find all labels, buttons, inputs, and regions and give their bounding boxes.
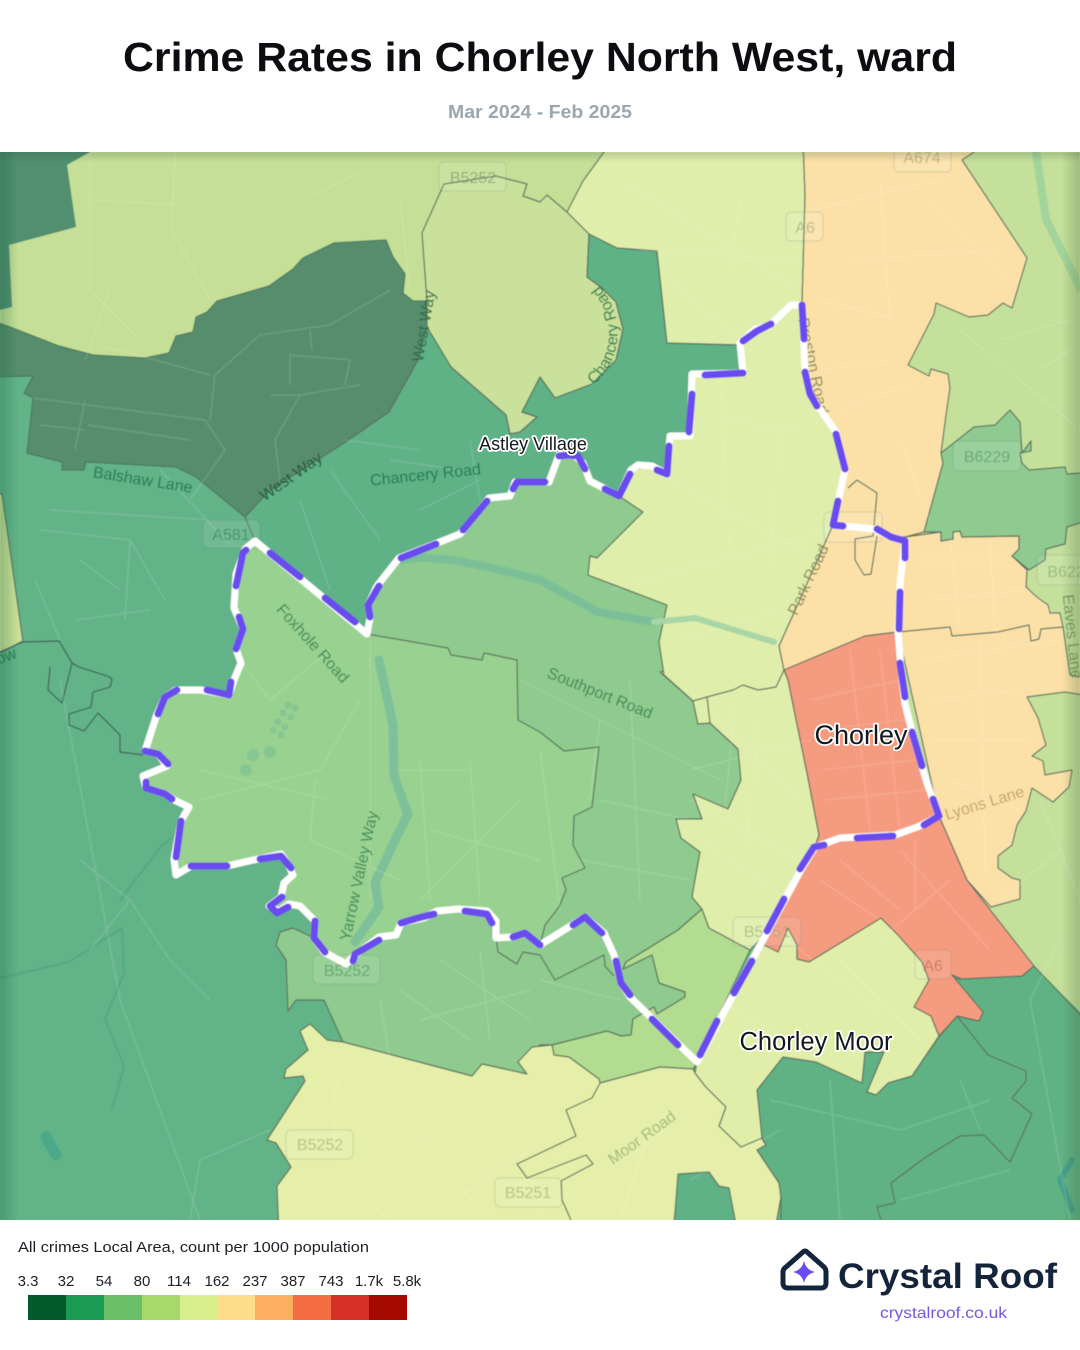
road labels	[0, 286, 1080, 1165]
area: north-west light green	[0, 152, 604, 358]
road labels: Chancery Road	[588, 286, 622, 383]
website: crystalroof.co.uk	[880, 1305, 1008, 1322]
icon: house with star	[783, 1251, 826, 1288]
road shields: A581	[212, 527, 250, 544]
area: town west pale	[660, 653, 819, 950]
legend values: 1.7k	[355, 1273, 384, 1290]
place label: Chorley: Chorley	[814, 720, 908, 750]
title: Crime Rates in Chorley North West, ward	[123, 34, 957, 80]
roundabout tanks	[240, 702, 298, 776]
area: Chancery green	[244, 235, 623, 538]
legend	[18, 1240, 422, 1320]
area: south-east light green	[552, 909, 750, 1083]
legend values: 162	[204, 1273, 230, 1290]
area: Astley north light green	[420, 174, 568, 324]
area: left edge strip	[0, 494, 23, 656]
area: ward north-east pale	[588, 305, 845, 701]
area boundary lines in orange	[848, 480, 1063, 641]
legend values: 743	[318, 1273, 344, 1290]
road labels: Yarrow Valley Way	[338, 810, 382, 942]
road shields: B6229	[964, 449, 1010, 466]
legend values: 5.8k	[393, 1273, 422, 1290]
area: B6229 green	[924, 410, 1080, 570]
legend values: 80	[134, 1273, 150, 1290]
legend values	[18, 1273, 422, 1290]
road shields: B5252	[450, 170, 496, 187]
legend values: 387	[280, 1273, 306, 1290]
west boundary lines and brook	[0, 641, 143, 755]
road labels: Southport Road	[545, 665, 655, 723]
area boundary line: south-east interior	[877, 1016, 1032, 1220]
road labels: Park Road	[785, 542, 833, 618]
road labels: Preston Road	[794, 316, 831, 416]
place label: Astley Village: Astley Village	[479, 434, 587, 454]
area boundary line: notch	[707, 697, 710, 723]
logo: Crystal Roof	[783, 1251, 1057, 1322]
rivers	[0, 152, 1080, 1210]
road shields: A674	[903, 150, 941, 167]
area: south-west pale yellow	[267, 1024, 781, 1235]
ward boundary: purple dashes	[145, 305, 939, 1055]
legend values: 32	[58, 1273, 74, 1290]
legend values: 54	[96, 1273, 112, 1290]
wordmark: Crystal Roof	[838, 1257, 1057, 1296]
road shields	[203, 142, 1080, 1207]
road labels: Chancery Road	[369, 461, 482, 490]
road shields: A6	[795, 220, 815, 237]
legend values: 114	[167, 1273, 191, 1290]
road labels: West Way	[410, 289, 439, 363]
place label: Chorley Moor: Chorley Moor	[739, 1028, 893, 1056]
ward boundary: white line	[143, 305, 939, 1062]
legend values: 3.3	[18, 1273, 38, 1290]
legend values: 237	[242, 1273, 268, 1290]
road labels: Lyons Lane	[943, 784, 1027, 824]
area boundary line: south-west interior	[517, 1083, 600, 1220]
road labels: Foxhole Road	[273, 601, 352, 687]
area: Chorley Moor pale	[695, 918, 939, 1147]
area: east green	[904, 152, 1080, 1013]
road labels: West Way	[257, 450, 326, 505]
area: north pale yellow-green	[567, 140, 805, 345]
road shields: B5251	[744, 924, 790, 941]
road shields: A6	[923, 958, 943, 975]
road shields: B5252	[297, 1137, 343, 1154]
area: Chorley town centre red	[764, 632, 1034, 1036]
legend colour bar	[28, 1295, 407, 1320]
streets	[33, 152, 1080, 1220]
area: south patch green	[673, 1170, 736, 1220]
legend title: All crimes Local Area, count per 1000 population	[18, 1240, 369, 1256]
area: top-left dark block	[0, 140, 90, 312]
area boundary lines in ward	[367, 634, 614, 980]
map edge shading	[0, 152, 1080, 1220]
area: Park Road orange	[779, 525, 905, 670]
road shields: B5251	[505, 1185, 551, 1202]
area: north-east orange	[802, 140, 1027, 537]
road labels: Moor Road	[605, 1108, 679, 1168]
area: east orange	[898, 531, 1080, 907]
area: darkest green west	[0, 240, 427, 517]
area: ward medium green	[275, 458, 740, 1076]
road shields: B5252	[324, 963, 370, 980]
area: ward west lighter green	[143, 541, 599, 964]
road labels: Balshaw Lane	[92, 464, 194, 497]
area: south-east dark green	[757, 966, 1080, 1235]
subtitle: date range: Mar 2024 - Feb 2025	[448, 102, 632, 122]
